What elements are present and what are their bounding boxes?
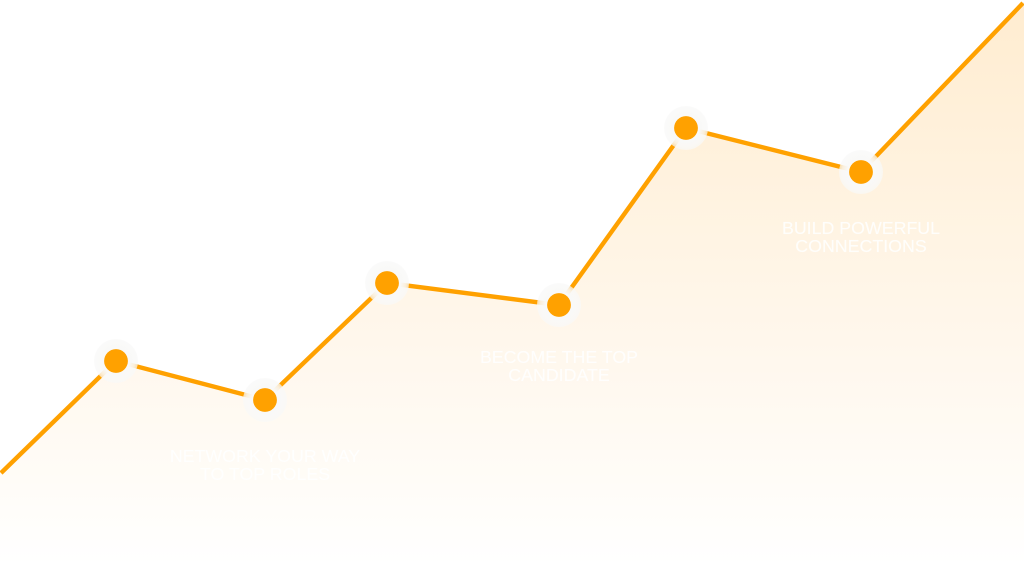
marker: step 4 bbox=[537, 283, 581, 327]
marker: step 3 bbox=[365, 261, 409, 305]
label: become the top candidate: BECOME THE TOP bbox=[480, 347, 638, 367]
marker: step 2 bbox=[243, 378, 287, 422]
marker: step 5 bbox=[664, 106, 708, 150]
label: network your way to top roles bbox=[170, 446, 360, 484]
label: become the top candidate bbox=[480, 347, 638, 385]
label: network your way to top roles: TO TOP ROLES bbox=[200, 464, 330, 484]
label: network your way to top roles: NETWORK YOUR WAY bbox=[170, 446, 360, 466]
label: build powerful connections: BUILD POWERFUL bbox=[782, 218, 940, 238]
label: become the top candidate: CANDIDATE bbox=[508, 365, 610, 385]
label: build powerful connections: CONNECTIONS bbox=[795, 236, 927, 256]
marker: step 1 bbox=[94, 339, 138, 383]
label: build powerful connections bbox=[782, 218, 940, 256]
marker: step 6 bbox=[839, 150, 883, 194]
